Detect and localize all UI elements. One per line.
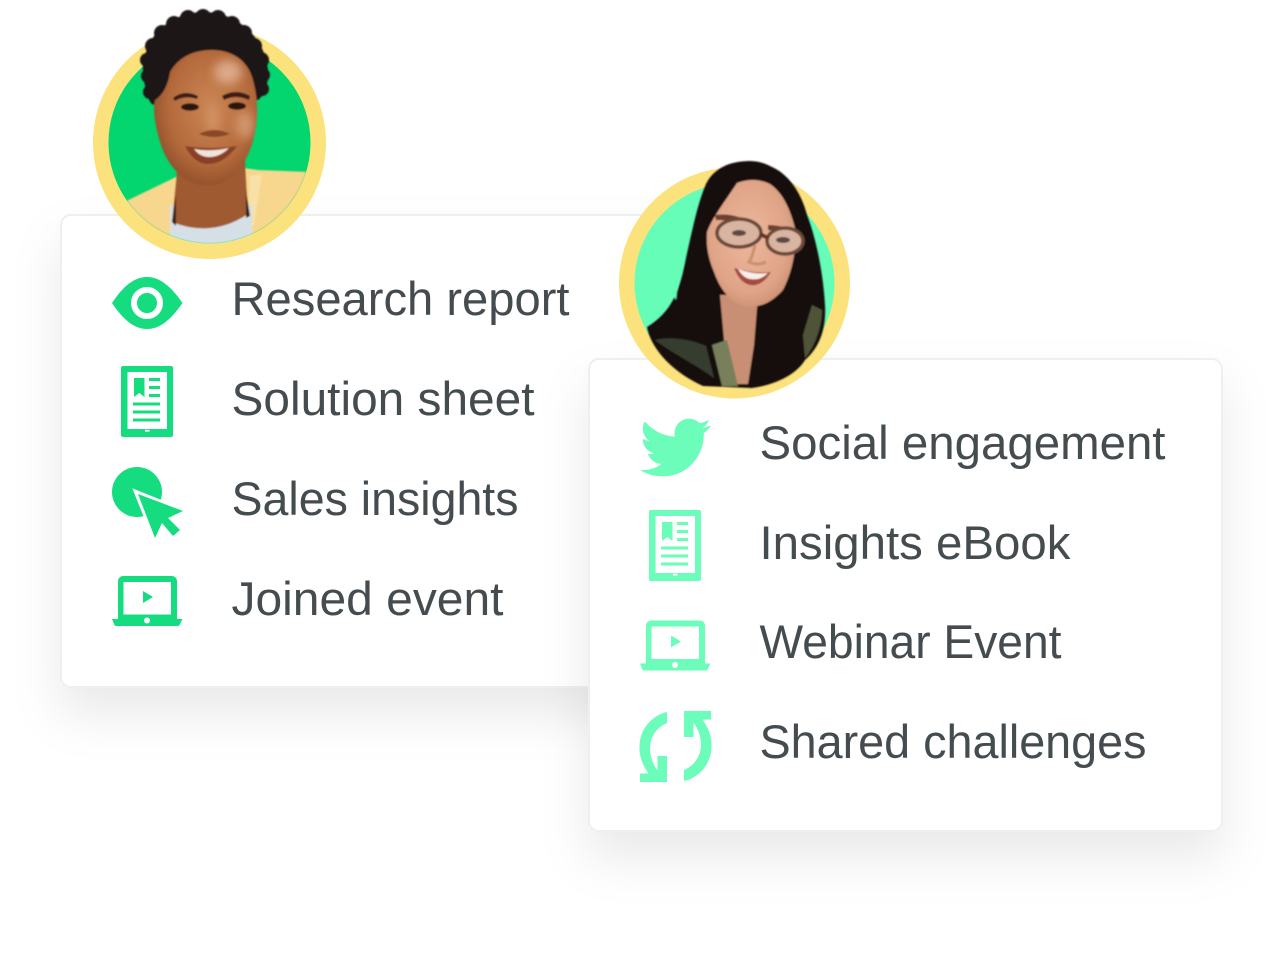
panel: right activity card [589,359,1222,831]
icon: eBook tablet [649,510,701,581]
label: Joined event: Joined event [232,572,504,625]
label: Shared challenges: Shared challenges [760,715,1146,768]
label: Sales insights: Sales insights [232,472,518,525]
icon: sync arrows [639,711,712,782]
icon: webinar laptop [640,620,710,670]
icon: eye [112,277,182,329]
panel: left activity card [61,215,694,687]
label: Webinar Event: Webinar Event [760,615,1062,668]
label: Insights eBook: Insights eBook [760,516,1071,569]
label: Social engagement: Social engagement [760,416,1166,469]
icon: twitter bird [640,419,711,476]
icon: solution sheet tablet [121,366,173,437]
label: Research report: Research report [232,272,570,325]
portrait: woman with short curly hair [93,9,326,259]
icon: cursor click [112,467,185,541]
portrait: woman with long dark hair and glasses [619,161,850,398]
label: Solution sheet: Solution sheet [232,372,534,425]
icon: laptop play [112,576,182,626]
